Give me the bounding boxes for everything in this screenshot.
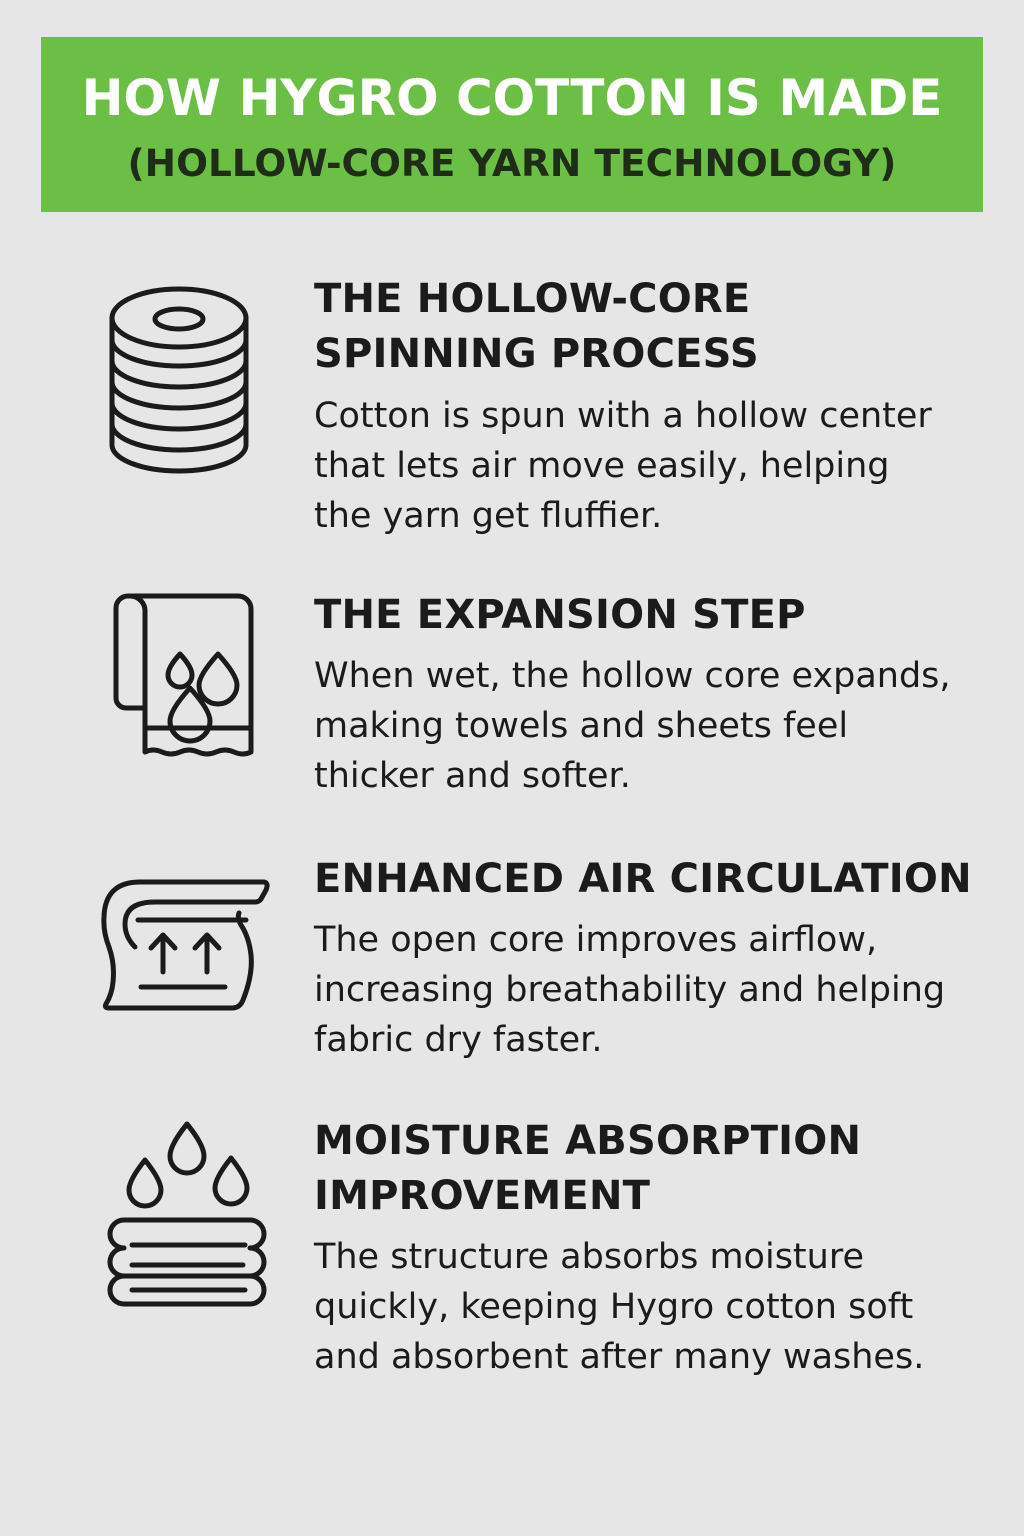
- section 4 heading: MOISTURE ABSORPTION: [314, 1118, 861, 1164]
- icon: towel with drops: [116, 596, 251, 754]
- section 2 body: [314, 656, 951, 796]
- icon: drops over folded towels: [110, 1124, 264, 1304]
- icon: yarn roll: [112, 289, 246, 471]
- section 3 body: increasing breathability and helping: [314, 970, 945, 1010]
- section 2 body: When wet, the hollow core expands,: [314, 656, 951, 696]
- title: HOW HYGRO COTTON IS MADE: [82, 69, 942, 127]
- section 2 body: thicker and softer.: [314, 756, 631, 796]
- section 1 body: [314, 396, 932, 536]
- section 4 body: and absorbent after many washes.: [314, 1337, 924, 1377]
- section 3 body: The open core improves airflow,: [314, 920, 877, 960]
- section 3 body: [314, 920, 945, 1060]
- section 3 heading: ENHANCED AIR CIRCULATION: [314, 856, 972, 902]
- section 1 heading: SPINNING PROCESS: [314, 331, 759, 377]
- subtitle: (HOLLOW-CORE YARN TECHNOLOGY): [128, 141, 896, 185]
- section 4 heading: [314, 1118, 861, 1219]
- section 4 body: [314, 1237, 924, 1377]
- section 1 heading: [314, 276, 759, 377]
- section 1 body: the yarn get fluffier.: [314, 496, 662, 536]
- section 3 body: fabric dry faster.: [314, 1020, 602, 1060]
- section 1 body: that lets air move easily, helping: [314, 446, 890, 486]
- section 4 body: quickly, keeping Hygro cotton soft: [314, 1287, 913, 1327]
- section 4 body: The structure absorbs moisture: [314, 1237, 864, 1277]
- section 1 heading: THE HOLLOW-CORE: [314, 276, 750, 322]
- icon: fabric airflow: [104, 882, 267, 1008]
- title banner: [41, 37, 983, 212]
- section 4 heading: IMPROVEMENT: [314, 1173, 650, 1219]
- section 1 body: Cotton is spun with a hollow center: [314, 396, 932, 436]
- icons: [101, 286, 270, 1306]
- section 2 heading: THE EXPANSION STEP: [314, 592, 806, 638]
- section 2 body: making towels and sheets feel: [314, 706, 848, 746]
